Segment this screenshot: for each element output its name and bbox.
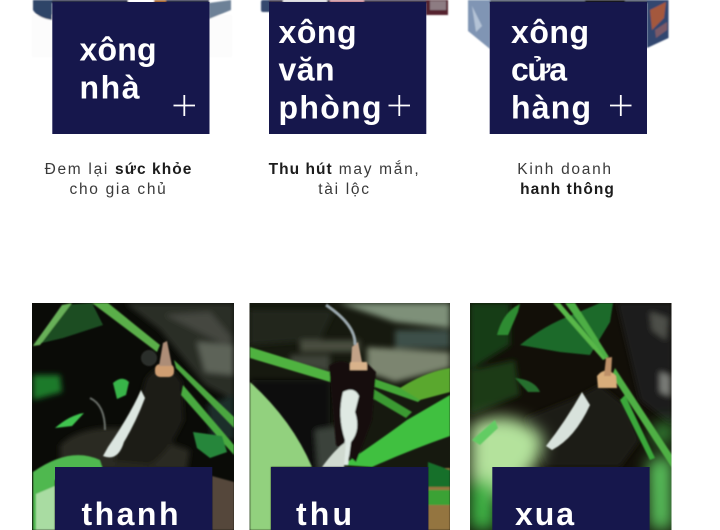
heading: xông văn phòng: xông	[278, 14, 356, 50]
heading: xông nhà: nhà	[80, 70, 140, 106]
card background	[269, 2, 426, 134]
heading: xông văn phòng: văn	[278, 52, 334, 88]
card background	[271, 467, 428, 530]
icon: plus	[174, 95, 195, 116]
heading: xông nhà	[80, 32, 156, 106]
card: xông cửa hàng	[490, 2, 647, 134]
heading: xông văn phòng: phòng	[278, 90, 382, 126]
photo: incense burner three	[470, 303, 672, 530]
card: thanh	[55, 467, 212, 530]
product image: xông cửa hàng box	[468, 0, 668, 49]
caption: hanh thông: hanh thông	[520, 181, 615, 198]
card: xông văn phòng	[269, 2, 426, 134]
card background	[492, 467, 650, 530]
heading: xông cửa hàng	[511, 14, 591, 126]
card: thu	[271, 467, 428, 530]
heading: xông cửa hàng: hàng	[511, 90, 591, 126]
icon: plus	[610, 95, 632, 116]
photo: incense burner two	[250, 303, 450, 530]
caption: may mắn: Thu hút may mắn,	[269, 161, 420, 178]
card background	[490, 2, 647, 134]
heading: xông cửa hàng: xông	[511, 14, 589, 50]
product image: xông nhà box	[32, 0, 232, 57]
heading: xông nhà: xông	[80, 32, 156, 68]
icon: plus	[388, 95, 410, 116]
product image: xông văn phòng box	[261, 0, 448, 15]
photo: incense burner one	[32, 303, 234, 530]
card background	[55, 467, 212, 530]
card: xông nhà	[52, 2, 209, 134]
caption: sức khỏe: Đem lại sức khỏe	[45, 161, 192, 178]
card: xua	[492, 467, 650, 530]
card background	[52, 2, 209, 134]
caption: may mắn: tài lộc	[318, 181, 371, 198]
heading: xông cửa hàng: cửa	[511, 52, 567, 88]
caption: sức khỏe: cho gia chủ	[70, 181, 167, 198]
caption: hanh thông: Kinh doanh	[517, 161, 613, 178]
heading: xông văn phòng	[278, 14, 382, 126]
